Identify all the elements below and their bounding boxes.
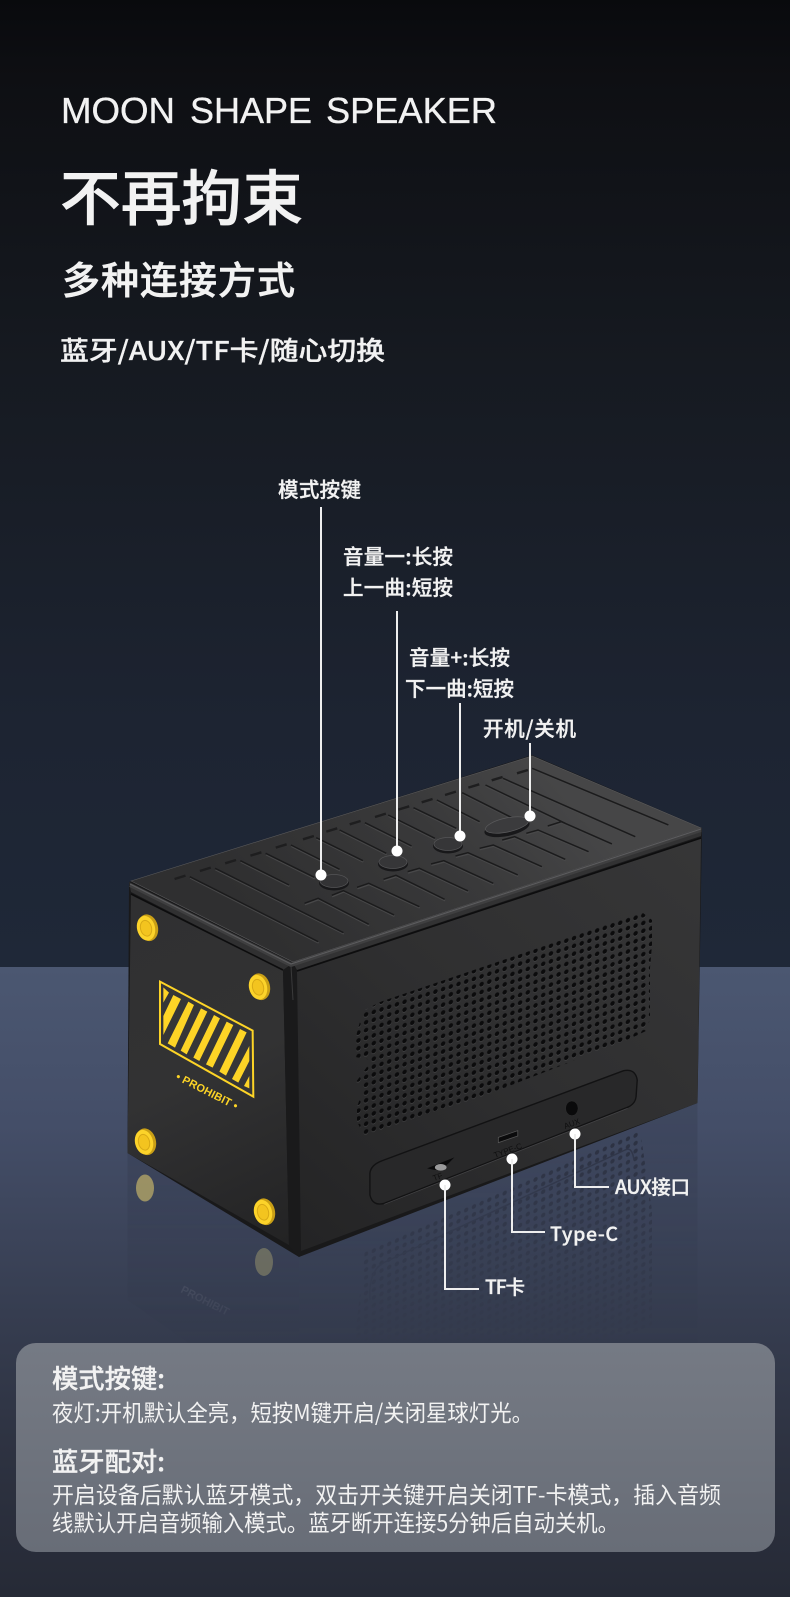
callout: TF card slot: TF卡	[485, 1271, 525, 1300]
callout: AUX port	[570, 1128, 690, 1200]
heading: mode button: 模式按键:	[52, 1359, 165, 1396]
subheading: 多种连接方式: 多种连接方式	[62, 250, 295, 305]
callout: volume up / next track: 下一曲:短按	[405, 672, 514, 702]
small TYPE-C marking: TYPE-C	[493, 1141, 523, 1160]
heading: bluetooth pairing: 蓝牙配对:	[52, 1442, 165, 1479]
text: bluetooth description: 线默认开启音频输入模式。蓝牙断开连接5分钟后自动关机。	[52, 1504, 619, 1538]
AUX jack	[566, 1101, 578, 1116]
callout: mode button: 模式按键	[278, 473, 361, 503]
yellow screws	[132, 912, 278, 1228]
heading: 不再拘束: 不再拘束	[60, 151, 303, 238]
Type-C port	[498, 1131, 518, 1143]
speaker top face	[131, 756, 701, 962]
small AUX marking: AUX	[563, 1117, 582, 1131]
callout: power	[483, 712, 576, 822]
TF slot	[427, 1157, 454, 1170]
small TF marking: TF	[432, 1171, 444, 1183]
callout: volume down / previous track: 上一曲:短按	[343, 571, 453, 601]
corner column	[283, 968, 301, 1257]
callout: volume up / next track	[405, 641, 514, 842]
connection list text: 蓝牙/AUX/TF卡/随心切换	[60, 331, 385, 368]
port plate	[370, 1070, 637, 1204]
front panel	[297, 838, 701, 1251]
floor reflection of speaker	[128, 1104, 698, 1307]
left panel	[128, 894, 289, 1245]
callout: AUX port: AUX接口	[615, 1171, 690, 1200]
title: MOON SHAPE SPEAKER: SPEAKER	[326, 90, 497, 131]
speaker product illustration	[128, 755, 702, 1257]
floor reflection of speaker: PROHIBIT	[179, 1284, 231, 1319]
top buttons	[319, 814, 531, 890]
text: bluetooth description: 开启设备后默认蓝牙模式，双击开关键开启关闭TF-卡模式，插入音频	[52, 1476, 721, 1510]
reflected screws	[136, 1174, 273, 1276]
text: bluetooth description	[52, 1476, 721, 1538]
title: MOON SHAPE SPEAKER: SHAPE	[190, 90, 312, 131]
callout: Type-C port	[506, 1154, 618, 1247]
panel: instructions	[16, 1343, 775, 1552]
PROHIBIT label: • PROHIBIT •	[174, 1071, 240, 1113]
hazard sign	[160, 982, 253, 1097]
callout: volume up / next track: 音量+:长按	[409, 641, 510, 671]
callout: TF card slot	[440, 1180, 525, 1300]
speaker grille	[355, 913, 652, 1136]
callout: power: 开机/关机	[483, 712, 576, 742]
speaker body silhouette	[128, 755, 702, 1257]
title: MOON SHAPE SPEAKER: MOON	[61, 90, 175, 131]
callout: volume down / previous track: 音量一:长按	[343, 540, 453, 570]
top face ribs and notches	[175, 768, 669, 943]
callout: volume down / previous track	[343, 540, 453, 856]
callout: Type-C port: Type-C	[550, 1218, 618, 1247]
top edge lips	[129, 828, 702, 1000]
callout: mode button	[278, 473, 361, 880]
text: night light: 夜灯:开机默认全亮，短按M键开启/关闭星球灯光。	[52, 1394, 533, 1428]
title: MOON SHAPE SPEAKER	[61, 90, 497, 131]
